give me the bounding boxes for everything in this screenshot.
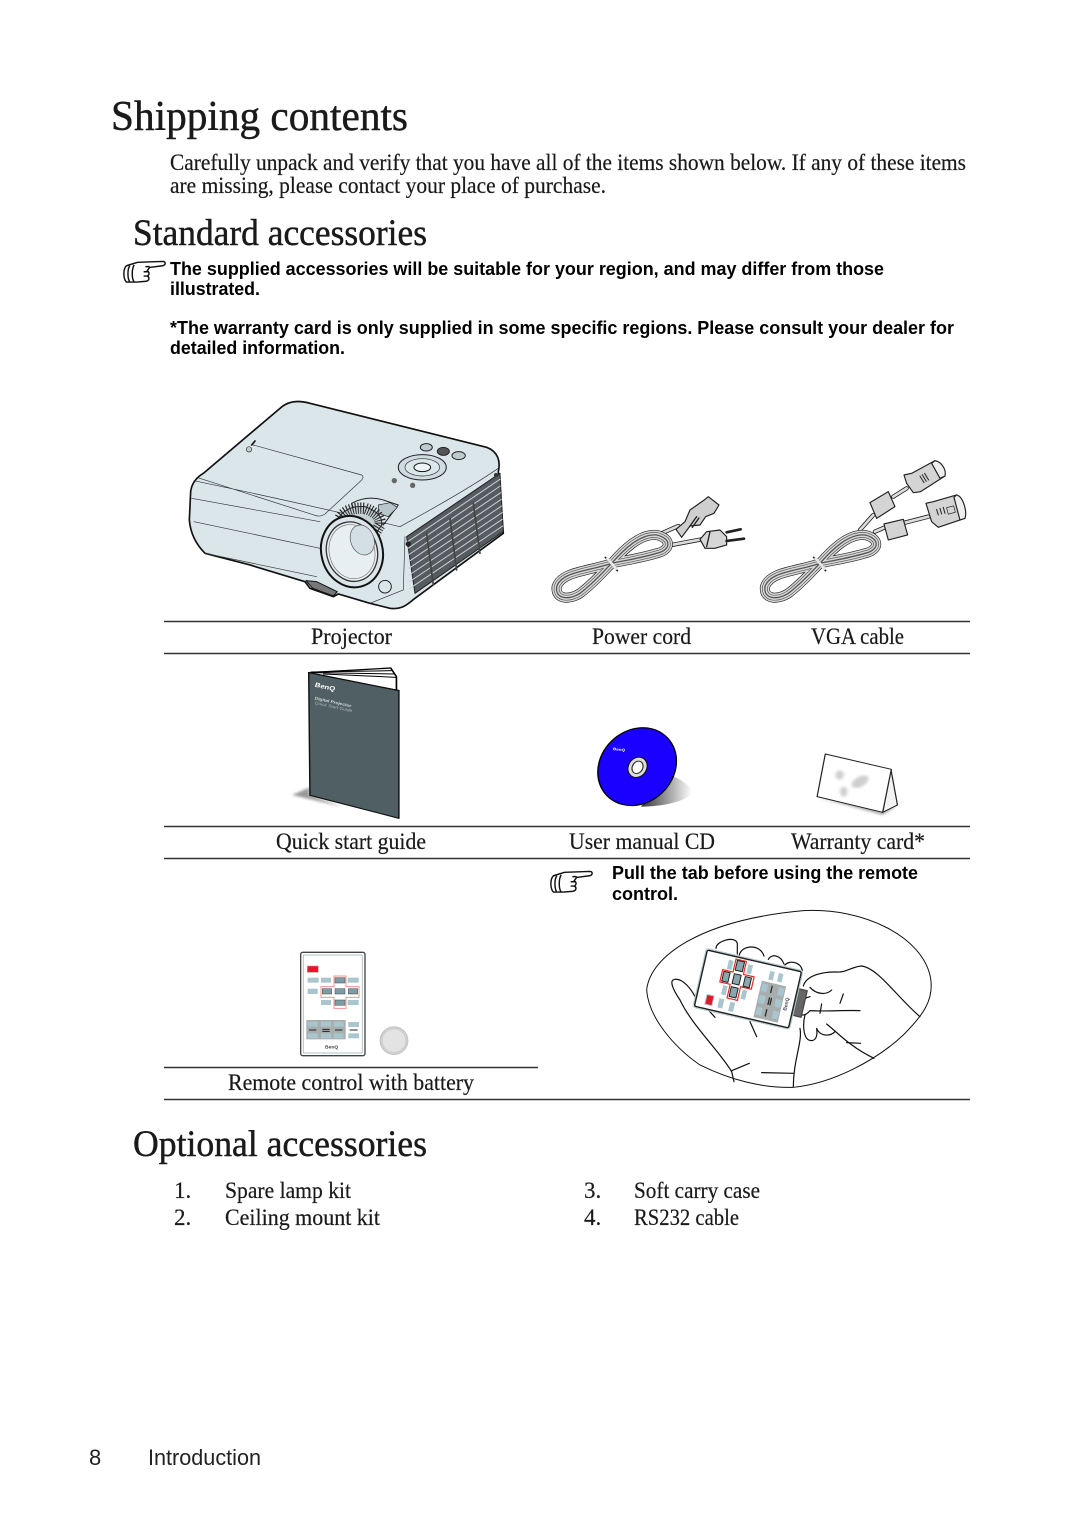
optional accessories list: Soft carry case bbox=[634, 1178, 760, 1203]
tab note text: control. bbox=[612, 884, 678, 904]
table row 2 labels: User manual CD bbox=[569, 829, 715, 854]
illustration: user manual CD bbox=[586, 719, 692, 814]
table row 2 labels: Warranty card* bbox=[791, 829, 925, 854]
table row 1 labels: VGA cable bbox=[811, 624, 904, 649]
table row 2 labels bbox=[164, 826, 970, 858]
icon: pointing hand note bbox=[124, 261, 165, 282]
optional accessories list: 1. bbox=[174, 1178, 191, 1203]
illustration: hands pulling remote tab: BenQ bbox=[782, 997, 791, 1011]
optional accessories list: 4. bbox=[584, 1205, 601, 1230]
illustration: quick start guide: Quick Start Guide bbox=[314, 701, 354, 713]
optional accessories list: 2. bbox=[174, 1205, 191, 1230]
note text block: *The warranty card is only supplied in some specific regions. Please consult your dealer for bbox=[170, 318, 954, 338]
page footer: Introduction bbox=[148, 1445, 261, 1470]
illustration: hands pulling remote tab bbox=[647, 910, 931, 1087]
note text block bbox=[170, 259, 954, 358]
table row 1 labels: Projector bbox=[311, 624, 392, 649]
illustration: quick start guide: BenQ bbox=[314, 681, 337, 693]
optional accessories list: Ceiling mount kit bbox=[225, 1205, 381, 1230]
note text block: detailed information. bbox=[170, 338, 345, 358]
illustration: quick start guide bbox=[292, 668, 399, 818]
note text block: The supplied accessories will be suitable for your region, and may differ from those bbox=[170, 259, 884, 279]
illustration: projector bbox=[189, 401, 503, 609]
tab note text: Pull the tab before using the remote bbox=[612, 863, 918, 883]
note text block: illustrated. bbox=[170, 279, 260, 299]
illustration: user manual CD: BenQ bbox=[613, 746, 626, 752]
optional accessories list bbox=[174, 1178, 760, 1230]
heading: standard accessories: Standard accessories bbox=[133, 213, 427, 254]
heading: optional accessories: Optional accessories bbox=[133, 1124, 427, 1165]
illustration: warranty card bbox=[817, 754, 897, 815]
intro text block: Carefully unpack and verify that you have all of the items shown below. If any of these items bbox=[170, 150, 966, 175]
page footer bbox=[89, 1445, 261, 1470]
table row 1 labels bbox=[164, 622, 970, 654]
intro text block bbox=[170, 150, 966, 198]
table row 2 labels: Quick start guide bbox=[276, 829, 426, 854]
illustration: remote control and battery bbox=[301, 952, 408, 1056]
page footer: 8 bbox=[89, 1445, 101, 1470]
illustration: quick start guide: Digital Projector bbox=[314, 696, 352, 708]
title: Shipping contents bbox=[111, 94, 408, 140]
optional accessories list: Spare lamp kit bbox=[225, 1178, 352, 1203]
intro text block: are missing, please contact your place of purchase. bbox=[170, 173, 606, 198]
optional accessories list: RS232 cable bbox=[634, 1205, 739, 1230]
table row 1 labels: Power cord bbox=[592, 624, 691, 649]
optional accessories list: 3. bbox=[584, 1178, 601, 1203]
icon: pointing hand tab note bbox=[551, 871, 592, 892]
illustration: remote control and battery: BenQ bbox=[325, 1045, 338, 1051]
tab note text bbox=[612, 863, 918, 904]
illustration: VGA cable bbox=[765, 461, 966, 598]
table row 3 labels: Remote control with battery bbox=[228, 1070, 474, 1095]
illustration: power cord bbox=[557, 497, 744, 598]
